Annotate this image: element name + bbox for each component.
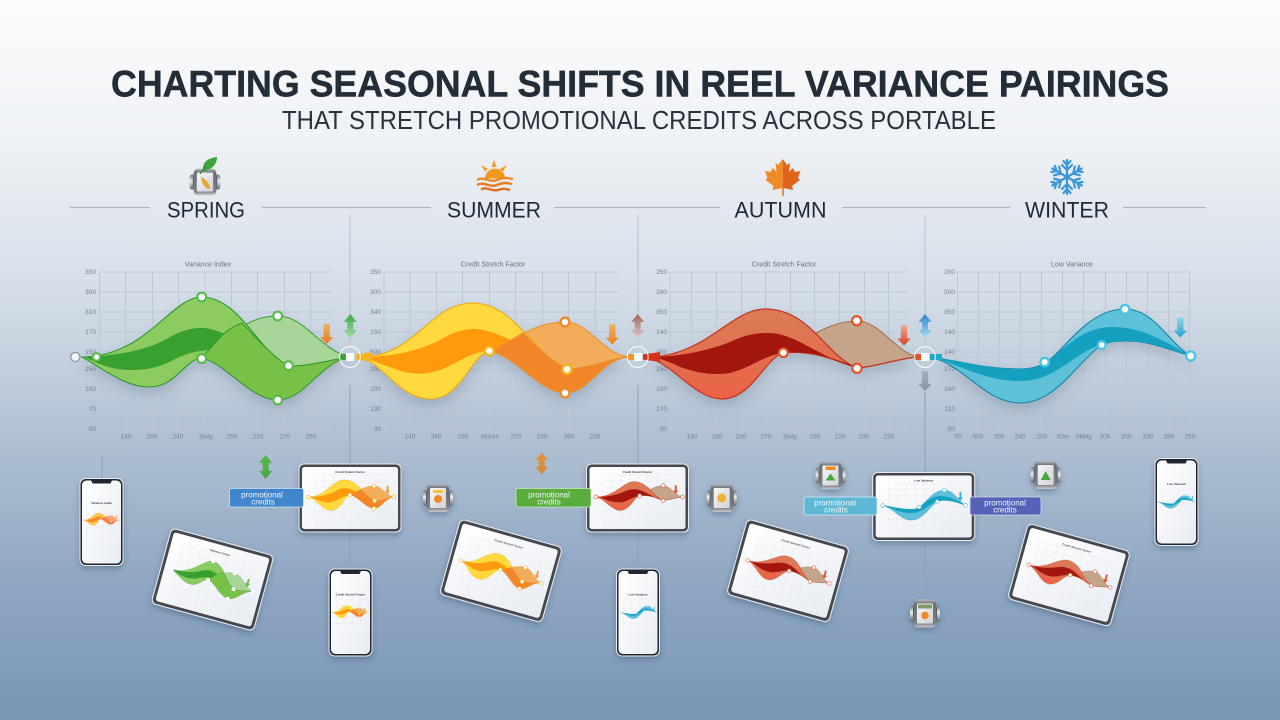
heading: summer: SUMMER — [447, 198, 541, 222]
x axis labels: summer: 270 — [511, 434, 522, 440]
x axis labels: winter: 5May — [1076, 434, 1093, 440]
tablet: summer tilted: Credit Stretch Factor — [494, 538, 524, 550]
heading: spring: SPRING — [167, 198, 245, 222]
y axis labels: autumn: 250 — [656, 269, 667, 276]
tablet: autumn — [586, 464, 688, 532]
y axis labels: winter: 110 — [945, 406, 955, 413]
arrow: green exchange — [259, 455, 272, 479]
x axis labels: winter: 230 — [1143, 434, 1154, 440]
tablet: summer: Credit Stretch Factor — [335, 470, 366, 474]
x axis labels: winter: 240 — [1015, 434, 1026, 440]
title: CHARTING SEASONAL SHIFTS IN REEL VARIANCE PAIRINGS — [111, 64, 1169, 104]
y axis labels: winter — [944, 269, 955, 433]
x axis labels: winter: 500 — [973, 434, 984, 440]
start marker: spring — [71, 352, 80, 362]
x axis labels: autumn — [687, 434, 895, 440]
x axis labels: winter — [954, 434, 1196, 440]
y axis labels: summer: 340 — [370, 309, 381, 316]
y axis labels: autumn: 30 — [660, 426, 667, 433]
data markers: summer right — [561, 318, 569, 397]
x axis labels: autumn: 140 — [687, 434, 698, 440]
data markers: summer — [485, 347, 572, 374]
y axis labels: summer: 30 — [374, 426, 381, 433]
y axis labels: winter: 200 — [944, 269, 955, 276]
chart title: summer: Credit Stretch Factor — [461, 262, 526, 268]
phone: centre: Low Variance — [628, 592, 648, 596]
x axis labels: spring: 220 — [253, 434, 264, 440]
x axis labels: spring: 140 — [121, 434, 132, 440]
x axis labels: spring — [121, 434, 317, 440]
y axis labels: winter: 500 — [944, 289, 955, 296]
x axis labels: winter: 200 — [994, 434, 1005, 440]
arrow: winter down — [1174, 318, 1187, 338]
panel: autumn chart — [647, 262, 918, 440]
y axis labels: spring — [85, 269, 96, 433]
phone: centre left: Credit Stretch Factor — [336, 592, 366, 596]
connector node: autumn to winter — [914, 347, 942, 367]
data markers: spring — [93, 293, 293, 404]
y axis labels: autumn — [656, 269, 667, 433]
panel: winter chart — [930, 262, 1196, 440]
x axis labels: autumn: Sixty — [783, 434, 798, 440]
x axis labels: winter: 50m — [1057, 434, 1069, 440]
x axis labels: summer — [405, 434, 601, 440]
tablet: summer — [299, 464, 401, 532]
y axis labels: autumn: 140 — [656, 329, 667, 336]
x axis labels: summer: 140 — [405, 434, 416, 440]
phone: right — [1155, 458, 1198, 546]
data markers: winter — [1040, 305, 1195, 366]
arrow: orange exchange — [535, 453, 548, 474]
icon: reel yellow — [707, 484, 737, 512]
label: promotional credits blue: credits — [251, 498, 275, 506]
chart title: autumn: Credit Stretch Factor — [752, 262, 817, 268]
phone: left — [80, 478, 123, 566]
x axis labels: spring: Sixty — [199, 434, 214, 440]
label: promotional credits blue: promotional — [241, 490, 283, 500]
phone: centre left — [329, 569, 372, 656]
y axis labels: spring: 170 — [85, 329, 96, 336]
y axis labels: winter: 140 — [944, 329, 955, 336]
label: promotional credits purple: promotional — [984, 498, 1026, 508]
x axis labels: winter: 290 — [1164, 434, 1175, 440]
tablet: autumn tilted right: Credit Stretch Factor — [1062, 542, 1092, 554]
y axis labels: winter: 50 — [948, 426, 955, 433]
label: promotional credits cyan: promotional — [814, 498, 856, 508]
y axis labels: summer: 150 — [370, 329, 381, 336]
x axis labels: spring: 200 — [147, 434, 158, 440]
icon: summer sun over waves — [477, 160, 513, 190]
x axis labels: summer: 230 — [537, 434, 548, 440]
x axis labels: spring: 270 — [280, 434, 291, 440]
phone: left: Variance Index — [91, 501, 112, 505]
x axis labels: autumn: 230 — [810, 434, 821, 440]
chart title: winter: Low Variance — [1051, 262, 1093, 268]
x axis labels: autumn: 230 — [736, 434, 747, 440]
icon: spring reel with leaf — [190, 157, 220, 195]
area series: spring — [82, 297, 350, 400]
label: promotional credits purple — [970, 497, 1041, 515]
heading: winter: WINTER — [1025, 198, 1109, 222]
y axis labels: autumn: 280 — [656, 289, 667, 296]
icon: autumn maple leaf — [765, 159, 800, 196]
x axis labels: spring: 240 — [173, 434, 184, 440]
y axis labels: winter: 160 — [944, 386, 955, 393]
x axis labels: winter: 200 — [1100, 434, 1111, 440]
subtitle: THAT STRETCH PROMOTIONAL CREDITS ACROSS PORTABLE — [282, 105, 996, 135]
connector node: summer to autumn — [627, 347, 660, 367]
lower column separators — [102, 385, 925, 591]
arrow: summer down — [606, 324, 619, 344]
y axis labels: spring: 150 — [85, 386, 96, 393]
x axis labels: summer: Marks — [481, 434, 500, 440]
connector node: spring to summer — [340, 347, 372, 367]
y axis labels: autumn: 170 — [656, 406, 667, 413]
x axis labels: summer: 340 — [431, 434, 442, 440]
y axis labels: summer: 200 — [370, 386, 381, 393]
x axis labels: summer: 260 — [564, 434, 575, 440]
label: promotional credits green: credits — [537, 498, 561, 506]
x axis labels: autumn: 230 — [884, 434, 895, 440]
tablet: autumn tilted — [726, 519, 850, 623]
arrow: autumn up and down — [918, 314, 932, 338]
y axis labels: winter: 140 — [944, 349, 955, 356]
phone: right: Low Variance — [1167, 482, 1186, 486]
x axis labels: autumn: 230 — [859, 434, 870, 440]
column separators — [350, 215, 925, 342]
y axis labels: autumn: 350 — [656, 309, 667, 316]
y axis labels: autumn: 150 — [656, 349, 667, 356]
x axis labels: autumn: 240 — [712, 434, 723, 440]
y axis labels: spring: 300 — [85, 289, 96, 296]
y axis labels: spring: 150 — [85, 349, 96, 356]
label: promotional credits purple: credits — [993, 506, 1017, 514]
chart title: spring: Variance Index — [185, 262, 232, 268]
data markers: autumn — [779, 316, 862, 373]
x axis labels: winter: 250 — [1185, 434, 1196, 440]
y axis labels: summer: 130 — [370, 406, 381, 413]
y axis labels: summer: 500 — [370, 349, 381, 356]
tablet: summer tilted — [439, 519, 563, 623]
x axis labels: spring: 250 — [227, 434, 238, 440]
icon: reel green and orange — [816, 462, 846, 490]
arrow: autumn down — [897, 326, 911, 346]
y axis labels: spring: 50 — [89, 426, 96, 433]
y axis labels: spring: 70 — [89, 406, 96, 413]
phone: centre — [616, 569, 660, 656]
x axis labels: winter: 200 — [1121, 434, 1132, 440]
tablet: winter: Low Variance — [914, 478, 934, 482]
y axis labels: summer — [370, 269, 381, 433]
y axis labels: spring: 350 — [85, 269, 96, 276]
label: promotional credits cyan: credits — [824, 506, 848, 514]
y axis labels: spring: 250 — [85, 366, 96, 373]
icon: reel orange — [423, 484, 453, 512]
arrow: grey down — [918, 371, 932, 391]
y axis labels: summer: 250 — [370, 366, 381, 373]
arrow: spring down — [320, 324, 334, 344]
tablet: winter — [873, 472, 975, 540]
heading: autumn: AUTUMN — [734, 198, 826, 222]
x axis labels: winter: T0 — [954, 434, 962, 440]
y axis labels: autumn: 250 — [656, 366, 667, 373]
x axis labels: summer: 230 — [590, 434, 601, 440]
icon: reel lower orange — [910, 600, 940, 628]
icon: reel green — [1031, 461, 1061, 489]
area series: autumn — [647, 309, 918, 399]
panel: spring chart — [71, 262, 350, 440]
label: promotional credits blue — [230, 488, 304, 507]
tablet: spring: Variance Index — [209, 548, 231, 557]
y axis labels: spring: 310 — [85, 309, 96, 316]
x axis labels: autumn: 270 — [761, 434, 772, 440]
label: promotional credits green: promotional — [528, 490, 570, 500]
y axis labels: autumn: 200 — [656, 386, 667, 393]
area series: winter — [930, 309, 1191, 403]
tablet: autumn: Credit Stretch Factor — [623, 470, 653, 474]
x axis labels: winter: 200 — [1037, 434, 1048, 440]
label: promotional credits green — [516, 488, 591, 507]
x axis labels: autumn: 220 — [835, 434, 846, 440]
y axis labels: summer: 300 — [370, 289, 381, 296]
y axis labels: winter: 350 — [944, 309, 955, 316]
label: promotional credits cyan — [804, 497, 877, 515]
x axis labels: summer: 230 — [458, 434, 469, 440]
tablet: autumn tilted right — [1008, 523, 1130, 627]
tablet: spring — [151, 528, 274, 631]
panel: summer chart — [360, 262, 628, 440]
arrow: summer up and down — [631, 314, 644, 338]
season header rules — [70, 206, 1206, 208]
y axis labels: winter: 370 — [944, 366, 955, 373]
x axis labels: spring: 250 — [306, 434, 317, 440]
area series: summer — [360, 303, 628, 399]
arrow: spring up and down — [344, 314, 357, 338]
icon: winter snowflake — [1050, 160, 1084, 194]
y axis labels: summer: 350 — [370, 269, 381, 276]
tablet: autumn tilted: Credit Stretch Factor — [781, 538, 811, 550]
